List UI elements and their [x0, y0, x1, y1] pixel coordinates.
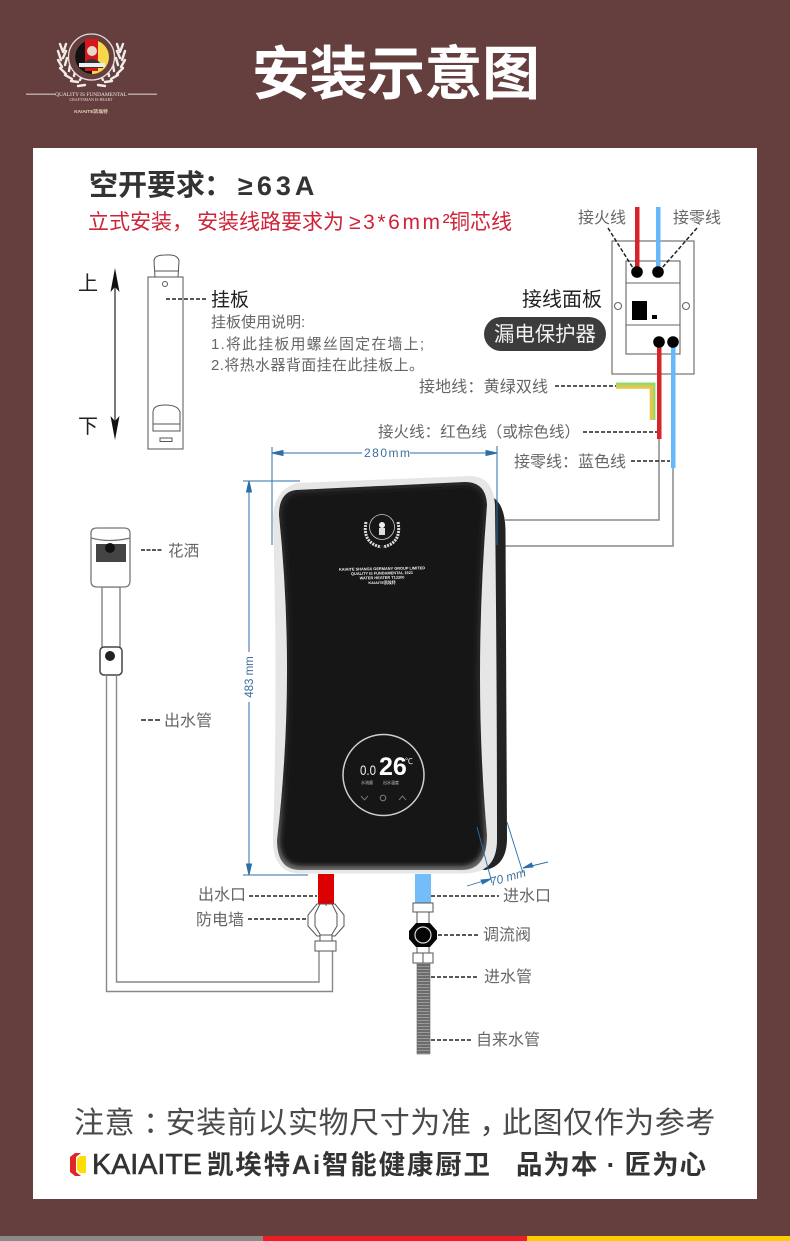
heater product text: KAIAITE凯埃特 [368, 580, 396, 585]
brand emblem [26, 34, 157, 115]
brand strip: KAIAITE [92, 1149, 202, 1181]
earth wire label: 接地线：黄绿双线 [419, 378, 548, 396]
touch display: 出水温度 [383, 779, 399, 785]
up-down direction indicator [78, 268, 120, 440]
white panel [33, 148, 757, 1199]
tap water pipe label [431, 1031, 540, 1049]
heater white shell [273, 476, 497, 874]
brand emblem: CRAFTSMAN IS HEART [69, 97, 113, 102]
water supply hose [417, 963, 430, 1054]
hanging plate drawing [148, 255, 183, 449]
inlet assembly [409, 874, 437, 1054]
installation wiring requirement: 立式安装， [88, 211, 193, 234]
shower label: 花洒 [168, 542, 199, 560]
neutral wire label: 接零线：蓝色线 [514, 453, 626, 471]
up-down direction indicator: 下 [78, 416, 98, 438]
wire callouts at panel top: 接火线 [578, 209, 626, 227]
depth dimension 70 mm [467, 822, 548, 889]
width dimension 280mm: 280mm [364, 446, 410, 460]
live and neutral wires [505, 207, 676, 546]
height dimension 483 mm [243, 481, 308, 875]
touch display: 26 [379, 753, 407, 781]
bottom colour bar [0, 1236, 790, 1241]
shower head [91, 528, 130, 675]
flow valve label [438, 926, 531, 944]
heater product text [339, 565, 425, 585]
breaker requirement heading: 空开要求 [89, 169, 205, 202]
shower label [141, 542, 199, 560]
live wire label: 接火线：红色线（或棕色线） [378, 423, 580, 441]
heater product text: QUALITY IS FUNDAMENTAL 1921 [351, 570, 414, 576]
wire callouts at panel top: 接零线 [673, 209, 721, 227]
water heater [270, 475, 507, 875]
brand strip [70, 1149, 706, 1181]
touch display: 水流量 [361, 779, 373, 785]
outlet hose [106, 675, 332, 992]
wiring panel diagram [505, 207, 694, 546]
brand strip: 凯埃特Ai智能健康厨卫 [207, 1150, 490, 1180]
hanging plate label and instructions: 挂板使用说明: [211, 313, 305, 331]
installation wiring requirement: 安装线路要求为 [197, 211, 344, 234]
touch display [343, 734, 424, 816]
hanging plate label and instructions: 挂板 [211, 289, 249, 311]
heater product text: KAIAITE SHANGX GERMANY GROUP LIMITED [339, 565, 425, 572]
green yellow earth wire [616, 385, 653, 420]
brand strip: 品为本 · 匠为心 [516, 1150, 706, 1180]
heater emblem [365, 514, 399, 547]
outlet connector [308, 874, 344, 951]
wire callouts at panel top [578, 209, 721, 268]
width dimension 280mm [272, 446, 497, 545]
touch display: 0.0 [360, 762, 376, 778]
footer note: 注意 ：安装前以实物尺寸为准 ，此图仅作为参考 [74, 1107, 716, 1140]
brand emblem: KAIAITE凯埃特 [74, 108, 108, 115]
hanging plate label and instructions: 1.将此挂板用螺丝固定在墙上; [211, 335, 424, 353]
installation wiring requirement: 铜芯线 [449, 211, 512, 234]
wreath left [58, 44, 85, 86]
touch display: ℃ [405, 757, 413, 766]
title: 安装示意图 [252, 42, 540, 107]
wiring panel label: 接线面板 [522, 288, 602, 311]
inlet pipe label [431, 968, 532, 986]
breaker requirement heading: ： [204, 170, 233, 202]
up-down direction indicator: 上 [78, 272, 98, 295]
hanging plate label and instructions: 2.将热水器背面挂在此挂板上。 [211, 356, 424, 374]
inlet label [431, 887, 551, 905]
depth dimension 70 mm: 70 mm [488, 865, 527, 889]
inlet pipe label: 进水管 [484, 968, 532, 986]
anti-electric wall label: 防电墙 [196, 911, 244, 929]
flow valve [409, 923, 437, 947]
flow valve label: 调流阀 [483, 926, 531, 944]
tap water pipe label: 自来水管 [476, 1031, 540, 1049]
wreath right [98, 44, 125, 86]
outlet pipe label: 出水管 [164, 712, 212, 730]
anti-electric wall label [196, 911, 307, 929]
outlet pipe label [141, 712, 212, 730]
brand emblem: QUALITY IS FUNDAMENTAL [55, 92, 127, 98]
breaker requirement heading: ≥63A [238, 171, 318, 201]
brand logo mark [70, 1153, 86, 1176]
height dimension 483 mm: 483 mm [244, 656, 256, 698]
heater product text: WATER HEATER T13300 [360, 575, 404, 580]
leakage protector badge [484, 317, 606, 351]
outlet label [198, 886, 317, 904]
installation wiring requirement: ≥3*6mm² [349, 211, 452, 234]
inlet label: 进水口 [503, 887, 551, 905]
hanging plate label and instructions [166, 289, 424, 374]
leakage protector badge: 漏电保护器 [494, 323, 596, 346]
heater black face [270, 475, 495, 875]
heater side body [470, 498, 507, 870]
outlet label: 出水口 [198, 886, 246, 904]
anti-electric wall fitting [308, 904, 344, 951]
